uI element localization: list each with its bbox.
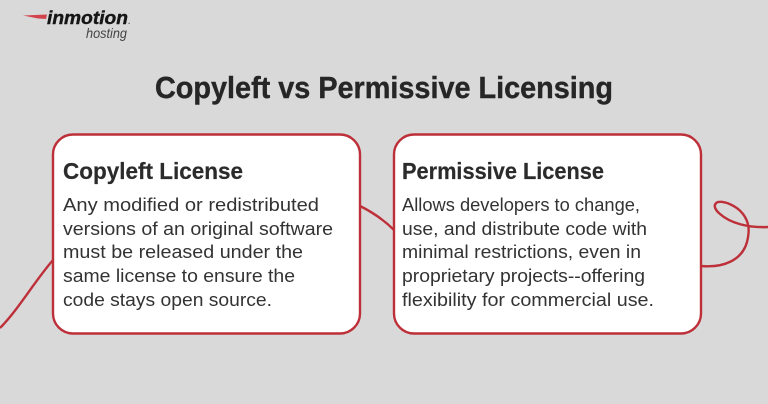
logo: InMotion Hosting: hosting bbox=[86, 25, 127, 41]
text block: copyleft description: same license to ensure the bbox=[63, 266, 295, 286]
decorative line: right loop bbox=[701, 202, 768, 266]
panel: permissive license bbox=[394, 134, 701, 334]
logo: InMotion Hosting: . bbox=[128, 17, 130, 26]
text block: permissive description bbox=[402, 195, 654, 310]
logo: InMotion Hosting: inmotion bbox=[47, 8, 128, 28]
text block: permissive description: minimal restrictions, even in bbox=[402, 242, 641, 262]
heading: copyleft license: Copyleft License bbox=[63, 158, 243, 184]
text block: permissive description: flexibility for commercial use. bbox=[402, 290, 654, 310]
text block: copyleft description: Any modified or redistributed bbox=[63, 195, 319, 215]
text block: permissive description: Allows developers to change, bbox=[402, 195, 640, 215]
text block: copyleft description: versions of an original software bbox=[63, 219, 333, 239]
text block: copyleft description: must be released under the bbox=[63, 242, 303, 262]
decorative line: bottom left bbox=[0, 260, 53, 328]
text block: permissive description: proprietary projects--offering bbox=[402, 266, 645, 286]
heading: permissive license: Permissive License bbox=[402, 158, 604, 184]
logo: InMotion Hosting bbox=[23, 8, 130, 41]
text block: copyleft description bbox=[63, 195, 333, 310]
decorative line: between panels bbox=[360, 206, 394, 230]
panel: copyleft license bbox=[53, 134, 360, 334]
text block: permissive description: use, and distribute code with bbox=[402, 219, 647, 239]
title: Copyleft vs Permissive Licensing bbox=[155, 70, 613, 105]
text block: copyleft description: code stays open source. bbox=[63, 290, 272, 310]
